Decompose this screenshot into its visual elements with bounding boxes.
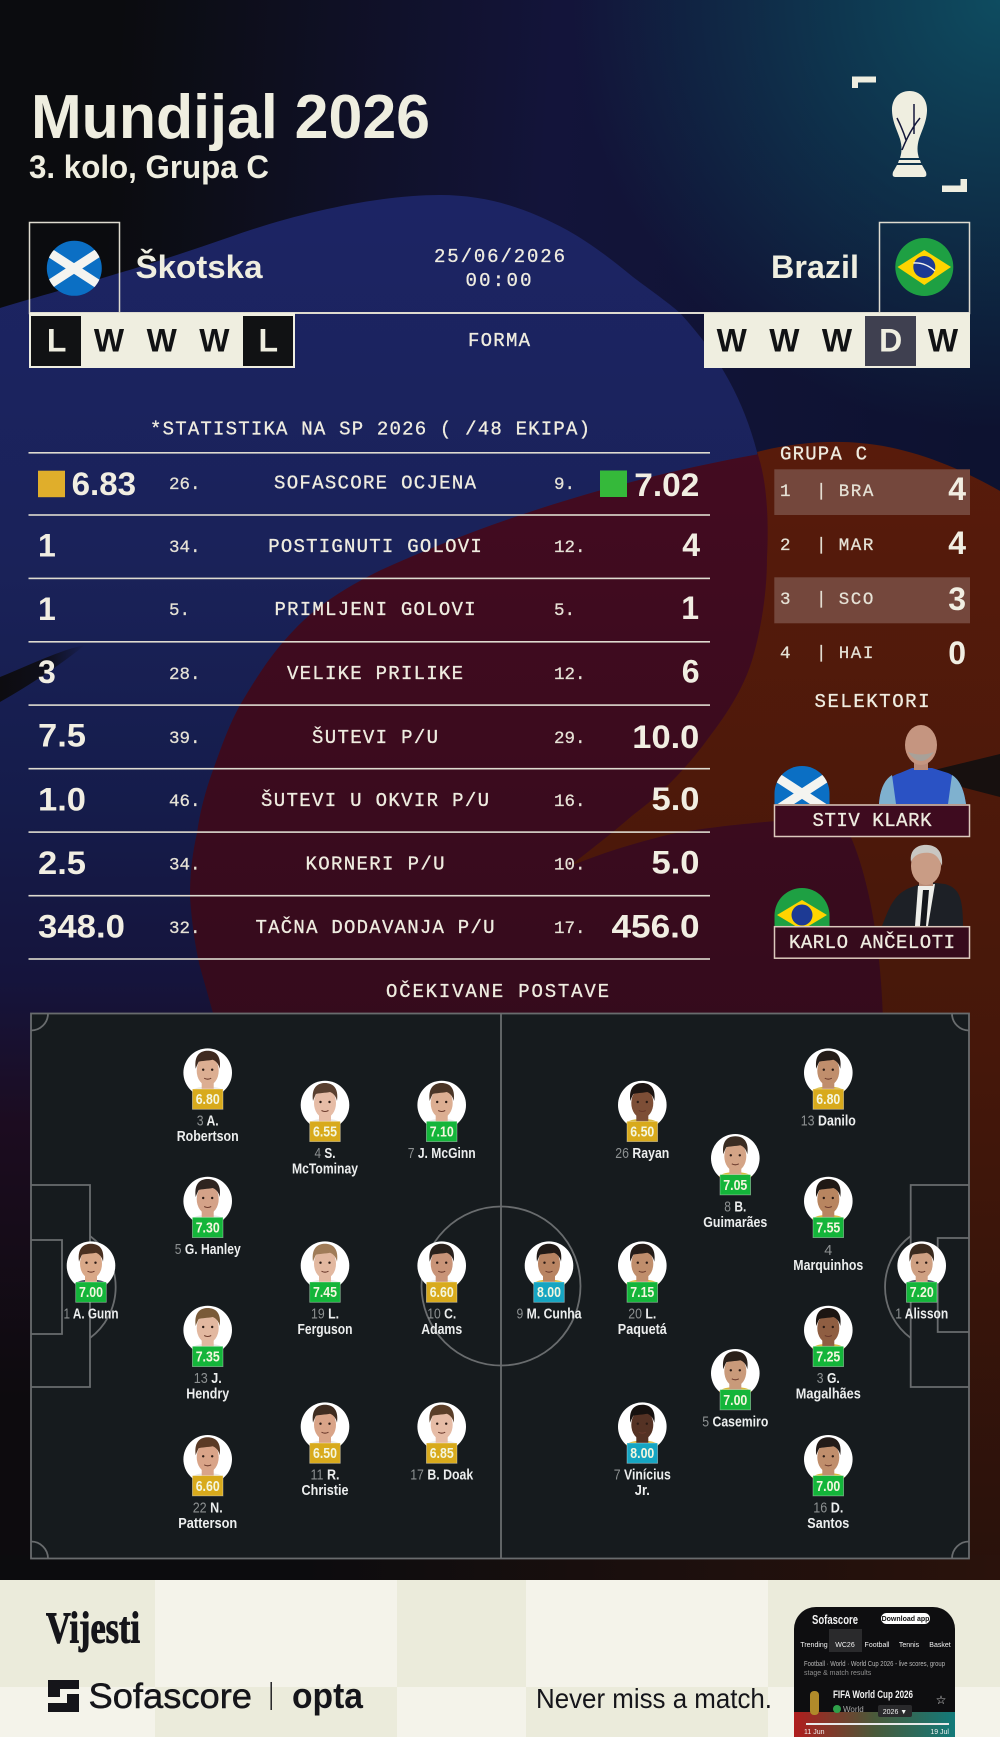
- player: A. Robertson: Robertson: [177, 1129, 239, 1145]
- player: B. Guimarães: [703, 1134, 767, 1231]
- player: Marquinhos: 4: [824, 1243, 832, 1259]
- form: Scotland: W: [199, 322, 230, 358]
- form: Scotland: [29, 313, 295, 368]
- subtitle: 3. kolo, Grupa C: [29, 149, 269, 185]
- player: S. McTominay: [292, 1081, 358, 1178]
- stat: corners per game: 10.: [554, 856, 586, 876]
- stat: shots on target per game: 46.: [169, 792, 201, 812]
- player: L. Ferguson: 7.45: [313, 1284, 337, 1301]
- player: B. Doak: 17 B. Doak: [410, 1468, 474, 1484]
- player: J. Hendry: [183, 1306, 232, 1402]
- stat: shots on target per game: [38, 781, 700, 818]
- phone mockup: Tennis: [899, 1642, 920, 1649]
- stats table heading: *STATISTIKA NA SP 2026 ( /48 EKIPA): [150, 418, 590, 440]
- stat: goals scored: 12.: [554, 538, 586, 558]
- group row: BRA: |: [816, 482, 827, 502]
- player: B. Guimarães: 8 B.: [724, 1199, 746, 1215]
- player: Rayan: 6.50: [630, 1124, 654, 1140]
- stat: goals scored: POSTIGNUTI GOLOVI: [268, 536, 482, 558]
- stat: goals conceded: PRIMLJENI GOLOVI: [274, 599, 476, 621]
- player: G. Magalhães: 7.25: [816, 1348, 840, 1366]
- phone mockup: Download app: [882, 1616, 929, 1623]
- player: N. Patterson: 22 N.: [193, 1500, 223, 1516]
- stat: accurate passes per game: [38, 908, 700, 945]
- player: L. Ferguson: Ferguson: [298, 1322, 352, 1338]
- phone mockup: Basket: [929, 1642, 951, 1649]
- stat: goals scored: 1: [38, 528, 56, 564]
- team: Brazil header: [771, 222, 970, 314]
- group row: SCO: SCO: [839, 590, 873, 610]
- stat: big chances: 12.: [554, 665, 586, 685]
- player: N. Patterson: 6.60: [196, 1478, 220, 1495]
- stat: goals scored: 4: [682, 527, 700, 563]
- group row: MAR: |: [816, 536, 827, 556]
- stat: shots on target per game: ŠUTEVI U OKVIR P/U: [261, 790, 489, 812]
- title: [29, 83, 430, 185]
- coach: Karlo Ančeloti: [770, 845, 970, 958]
- group row: MAR: MAR: [839, 536, 874, 556]
- player: D. Santos: Santos: [807, 1516, 849, 1532]
- icon: world cup trophy: [852, 76, 967, 192]
- player: Danilo: 6.80: [816, 1091, 840, 1108]
- stat: shots per game: 29.: [554, 729, 586, 749]
- stat: accurate passes per game: 32.: [169, 919, 201, 939]
- player: J. Hendry: Hendry: [186, 1386, 229, 1402]
- player: Marquinhos: Marquinhos: [793, 1258, 863, 1274]
- group row: BRA: 4: [948, 471, 966, 507]
- player: J. Hendry: 7.35: [196, 1348, 220, 1366]
- group row: HAI: HAI: [839, 644, 873, 664]
- stat: Sofascore rating: 7.02: [634, 467, 699, 503]
- player: R. Christie: [301, 1402, 349, 1499]
- logo: Vijesti: Vijesti: [46, 1604, 140, 1652]
- phone mockup: World: [843, 1705, 864, 1714]
- stat: corners per game: 2.5: [38, 845, 86, 881]
- stat: shots per game: ŠUTEVI P/U: [312, 727, 438, 749]
- logo: Sofascore and Opta: opta: [292, 1675, 364, 1716]
- form: Brazil: [704, 313, 970, 368]
- stat: Sofascore rating: 6.83: [72, 466, 136, 502]
- stat: Sofascore rating: 26.: [169, 475, 201, 495]
- player: B. Doak: [410, 1402, 474, 1484]
- player: Marquinhos: 7.55: [816, 1220, 840, 1236]
- player: C. Adams: Adams: [421, 1322, 462, 1338]
- player: J. Hendry: 13 J.: [194, 1371, 222, 1387]
- stat: shots per game: 7.5: [38, 718, 86, 754]
- team name: Škotska: Škotska: [136, 247, 263, 285]
- group row: HAI: 4: [780, 644, 791, 664]
- player: N. Patterson: Patterson: [178, 1516, 237, 1532]
- player: B. Doak: 6.85: [430, 1445, 454, 1462]
- stat: shots on target per game: 16.: [554, 792, 586, 812]
- group row: MAR: [780, 525, 966, 561]
- player: Alisson: 7.20: [910, 1284, 934, 1301]
- stat: goals conceded: [38, 590, 699, 627]
- form: Scotland: L: [47, 322, 66, 358]
- stat: big chances: 3: [38, 654, 56, 690]
- form divider: [29, 312, 970, 314]
- form: Scotland: W: [147, 322, 178, 358]
- coach: Karlo Ančeloti: KARLO ANČELOTI: [789, 932, 955, 954]
- player: G. Hanley: 7.30: [196, 1220, 220, 1236]
- stat: big chances: 28.: [169, 665, 201, 685]
- player: Casemiro: 5 Casemiro: [702, 1414, 768, 1430]
- phone mockup: 11 Jun: [804, 1729, 825, 1736]
- player: Vinícius Jr.: Jr.: [635, 1483, 650, 1499]
- stat: goals conceded: 1: [38, 591, 56, 627]
- player: C. Adams: 10 C.: [427, 1307, 456, 1323]
- group row: SCO: 3: [948, 581, 966, 617]
- player: Vinícius Jr.: 8.00: [630, 1445, 654, 1462]
- player: M. Cunha: [516, 1241, 582, 1323]
- player: L. Ferguson: [298, 1241, 352, 1338]
- player: Alisson: [895, 1241, 948, 1323]
- panel: coaches: [770, 691, 970, 958]
- match date and time: 00:00: [466, 270, 532, 292]
- player: A. Robertson: 3 A.: [197, 1114, 219, 1130]
- phone mockup: Football · World · World Cup 2026 - live scores, group: [804, 1661, 945, 1668]
- coach: Stiv Klark: STIV KLARK: [812, 810, 932, 832]
- group row: HAI: [780, 635, 966, 671]
- player: Rayan: [615, 1081, 669, 1162]
- player: S. McTominay: McTominay: [292, 1162, 358, 1178]
- player: S. McTominay: 4 S.: [314, 1146, 336, 1162]
- player: R. Christie: 11 R.: [310, 1468, 340, 1484]
- lineups heading: OČEKIVANE POSTAVE: [386, 981, 609, 1003]
- player: A. Robertson: [177, 1048, 239, 1145]
- player: J. McGinn: 7.10: [430, 1124, 454, 1140]
- form: Brazil: D: [879, 322, 902, 358]
- player: C. Adams: 6.60: [430, 1284, 454, 1301]
- panel: stats table: [28, 452, 710, 960]
- phone mockup: WC26: [835, 1642, 855, 1649]
- player: B. Guimarães: 7.05: [723, 1177, 747, 1194]
- form label: FORMA: [468, 330, 531, 352]
- stat: corners per game: 5.0: [652, 844, 700, 880]
- team name: Brazil: Brazil: [771, 249, 859, 285]
- player: C. Adams: [417, 1241, 466, 1338]
- player: B. Guimarães: Guimarães: [703, 1215, 767, 1231]
- tagline: Never miss a match.: [536, 1683, 772, 1714]
- form: Scotland: L: [259, 322, 278, 358]
- group row: MAR: 4: [948, 525, 966, 561]
- player: D. Santos: [804, 1435, 853, 1532]
- match date and time: [434, 246, 565, 292]
- panel: group C table: [774, 444, 970, 671]
- player: J. McGinn: 7 J. McGinn: [408, 1146, 476, 1162]
- player: M. Cunha: 8.00: [537, 1284, 561, 1301]
- player: S. McTominay: 6.55: [313, 1124, 337, 1140]
- player: Casemiro: [702, 1349, 768, 1430]
- stat: shots per game: 39.: [169, 729, 201, 749]
- player: Danilo: [801, 1048, 856, 1130]
- panel: group C table: GRUPA C: [780, 444, 867, 466]
- group row: SCO: [780, 581, 966, 617]
- phone mockup: Football: [865, 1642, 890, 1649]
- match date and time: 25/06/2026: [434, 246, 565, 268]
- form: Brazil: W: [822, 322, 853, 358]
- phone mockup: [794, 1607, 955, 1737]
- player: D. Santos: 7.00: [816, 1478, 840, 1495]
- stat: Sofascore rating: SOFASCORE OCJENA: [274, 473, 477, 495]
- icon: Scotland flag: [44, 240, 104, 297]
- player: G. Hanley: [175, 1177, 241, 1258]
- panel: coaches: SELEKTORI: [814, 691, 930, 713]
- player: D. Santos: 16 D.: [813, 1500, 843, 1516]
- player: L. Paquetá: [618, 1241, 668, 1338]
- stat: shots on target per game: 5.0: [652, 781, 700, 817]
- phone mockup: stage & match results: [804, 1670, 872, 1677]
- player: Danilo: 13 Danilo: [801, 1114, 856, 1130]
- player: J. McGinn: [408, 1081, 476, 1162]
- player: L. Paquetá: Paquetá: [618, 1322, 668, 1338]
- phone mockup: Sofascore: [812, 1612, 858, 1627]
- player: A. Robertson: 6.80: [196, 1091, 220, 1108]
- group row: BRA: 1: [780, 482, 791, 502]
- player: Rayan: 26 Rayan: [615, 1146, 669, 1162]
- group row: HAI: 0: [948, 635, 966, 671]
- team: Scotland header: [30, 222, 263, 314]
- player: L. Paquetá: 20 L.: [628, 1307, 656, 1323]
- group row: SCO: |: [816, 590, 827, 610]
- stat: Sofascore rating: [38, 466, 699, 503]
- stat: corners per game: 34.: [169, 856, 201, 876]
- stat: Sofascore rating: 9.: [554, 475, 575, 495]
- player: A. Gunn: 1 A. Gunn: [64, 1307, 118, 1323]
- group row: SCO: 3: [780, 590, 791, 610]
- stat: goals scored: 34.: [169, 538, 201, 558]
- stat: accurate passes per game: 456.0: [612, 908, 700, 944]
- form: Scotland: W: [94, 322, 125, 358]
- player: Alisson: 1 Alisson: [895, 1307, 948, 1323]
- stat: shots per game: [38, 718, 699, 755]
- group row: MAR: 2: [780, 536, 791, 556]
- player: N. Patterson: [178, 1435, 237, 1532]
- phone mockup: FIFA World Cup 2026: [833, 1689, 913, 1701]
- stat: corners per game: [38, 844, 700, 881]
- player: G. Magalhães: 3 G.: [817, 1371, 840, 1387]
- form: Brazil: W: [717, 322, 748, 358]
- coach: Stiv Klark: [770, 725, 970, 836]
- phone mockup: 2026 ▼: [883, 1709, 907, 1716]
- logo: Sofascore and Opta: [48, 1675, 364, 1716]
- player: R. Christie: 6.50: [313, 1445, 337, 1462]
- form: Brazil: W: [769, 322, 800, 358]
- player: Marquinhos: [793, 1177, 863, 1274]
- stat: corners per game: KORNERI P/U: [306, 854, 444, 876]
- logo: Sofascore and Opta: Sofascore: [88, 1677, 252, 1716]
- stat: big chances: [38, 654, 700, 690]
- player: G. Magalhães: [796, 1306, 861, 1402]
- phone mockup: 19 Jul: [930, 1729, 949, 1736]
- stat: shots per game: 10.0: [632, 719, 699, 755]
- stat: big chances: 6: [682, 654, 700, 690]
- title: Mundijal 2026: [31, 83, 430, 152]
- player: R. Christie: Christie: [302, 1483, 348, 1499]
- player: Casemiro: 7.00: [723, 1392, 747, 1409]
- phone mockup: Trending: [800, 1642, 828, 1649]
- player: L. Ferguson: 19 L.: [311, 1307, 339, 1323]
- stat: accurate passes per game: 17.: [554, 919, 586, 939]
- stat: goals conceded: 5.: [554, 601, 575, 621]
- stat: goals scored: [38, 527, 700, 564]
- form: Brazil: W: [928, 322, 959, 358]
- player: G. Hanley: 5 G. Hanley: [175, 1242, 241, 1258]
- player: M. Cunha: 9 M. Cunha: [516, 1307, 582, 1323]
- chart: football pitch lineups: [31, 1014, 969, 1558]
- stat: big chances: VELIKE PRILIKE: [287, 663, 463, 685]
- stat: goals conceded: 5.: [169, 601, 190, 621]
- player: A. Gunn: 7.00: [79, 1284, 103, 1301]
- stat: accurate passes per game: TAČNA DODAVANJA P/U: [256, 917, 494, 939]
- player: Vinícius Jr.: [614, 1402, 671, 1499]
- player: G. Magalhães: Magalhães: [796, 1386, 861, 1402]
- player: Vinícius Jr.: 7 Vinícius: [614, 1468, 671, 1484]
- group row: BRA: [780, 471, 966, 507]
- footer: [0, 1580, 1000, 1737]
- group row: HAI: |: [816, 644, 827, 664]
- stat: goals conceded: 1: [681, 590, 699, 626]
- group row: BRA: BRA: [839, 482, 874, 502]
- stat: shots on target per game: 1.0: [38, 782, 86, 818]
- icon: Brazil flag: [895, 238, 953, 296]
- phone mockup: ☆: [936, 1693, 946, 1707]
- stat: accurate passes per game: 348.0: [38, 909, 125, 945]
- player: A. Gunn: [64, 1241, 118, 1323]
- player: L. Paquetá: 7.15: [630, 1284, 654, 1301]
